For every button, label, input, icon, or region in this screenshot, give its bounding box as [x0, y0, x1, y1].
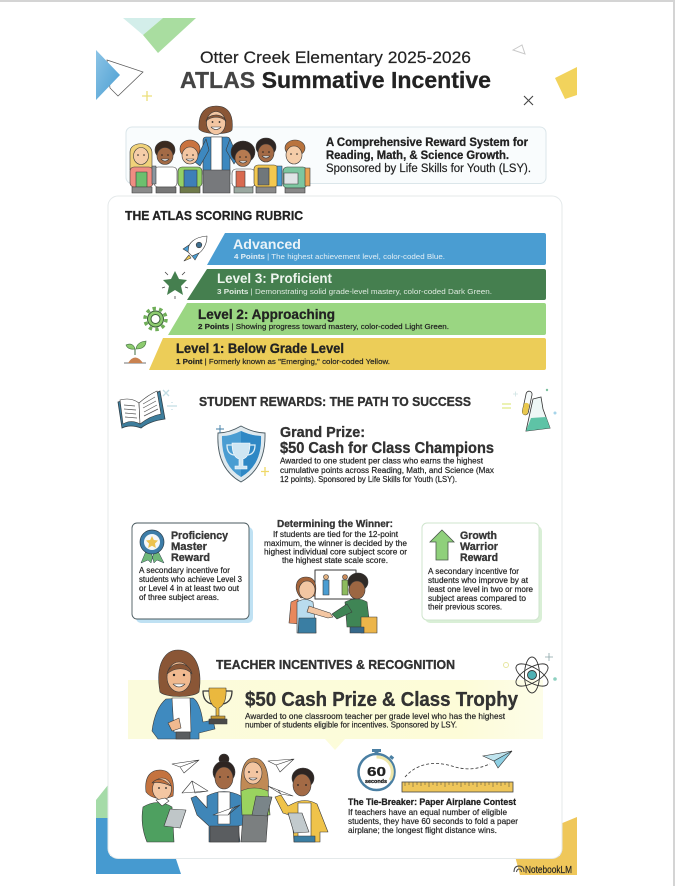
student 3	[178, 140, 202, 193]
panel: main card	[108, 196, 562, 858]
student 4	[231, 141, 255, 193]
background shape: blue bottom-left	[96, 818, 181, 874]
panel: scoring rubric	[124, 209, 546, 370]
title line: main heading: ATLAS Summative Incentive	[180, 67, 491, 93]
background shape: yellow bottom-right	[515, 817, 577, 875]
grand prize text: $50 Cash for Class Champions	[280, 440, 494, 457]
title	[180, 48, 491, 93]
advanced title: Advanced	[233, 236, 301, 252]
panel: proficiency master reward: Reward	[171, 552, 210, 564]
banner text	[326, 137, 531, 175]
tie-breaker text: If teachers have an equal number of eligible	[348, 807, 507, 817]
prize description: number of students eligible for incentives. Sponsored by LSY.	[245, 720, 457, 730]
panel: proficiency master reward: A secondary incentive for	[139, 565, 230, 575]
panel: determining the winner: Determining the Winner:	[277, 519, 393, 530]
panel: growth warrior reward: Growth	[460, 530, 497, 542]
panel: determining the winner	[264, 519, 407, 633]
panel: growth warrior reward: Reward	[460, 552, 498, 564]
level 3 description: 3 Points | Demonstrating solid grade-level mastery, color-coded Dark Green.	[217, 287, 492, 296]
decoration: book sparkles	[163, 390, 177, 410]
icon: gear	[145, 308, 166, 330]
decoration: small triangle	[513, 45, 525, 54]
panel: proficiency master reward: Proficiency	[171, 530, 229, 542]
teacher with tablet	[241, 758, 272, 842]
decoration: plus	[142, 91, 152, 101]
panel: determining the winner: maximum, the winner is decided by the	[264, 539, 407, 548]
icon: ribbon medal	[140, 530, 164, 563]
title line: school and year: Otter Creek Elementary 2025-2026	[200, 48, 471, 67]
background shape: green bottom-left	[96, 785, 108, 820]
panel: student rewards	[118, 389, 556, 484]
panel: determining the winner: the highest state scale score.	[282, 556, 388, 565]
teacher in blue blazer	[191, 754, 247, 842]
heading: scoring rubric: THE ATLAS SCORING RUBRIC	[125, 209, 303, 223]
tie-breaker text: students, they have 60 seconds to fold a paper	[348, 816, 518, 826]
flight path with airplane	[405, 751, 512, 777]
panel: growth warrior reward: students who improve by at	[428, 575, 529, 585]
panel: determining the winner: highest individual core subject score or	[264, 548, 407, 556]
icon: star	[162, 271, 188, 299]
panel: teacher incentives	[128, 650, 557, 750]
banner text: Reading, Math, & Science Growth.	[326, 150, 509, 162]
tie-breaker text: airplane; the longest flight distance wins.	[348, 825, 497, 835]
panel: determining the winner: If students are tied for the 12-point	[273, 530, 399, 539]
banner text: A Comprehensive Reward System for	[326, 137, 529, 149]
background shape: teal and green top chevron	[123, 18, 196, 53]
student 6	[283, 140, 310, 193]
teacher in yellow cardigan	[275, 768, 328, 842]
icon: trophy shield	[218, 426, 265, 482]
watermark: NotebookLM: NotebookLM	[525, 864, 572, 876]
decoration: flask symbols	[502, 389, 556, 414]
decoration: close cross	[524, 96, 533, 105]
icon: open book	[118, 391, 165, 428]
student 1	[130, 144, 153, 193]
panel: intro banner	[126, 127, 546, 184]
icon: 60 seconds stopwatch: 60	[367, 764, 386, 779]
decoration: yellow sparkle	[261, 467, 269, 476]
panel: growth warrior reward	[422, 523, 542, 623]
panel: growth warrior reward: Warrior	[460, 541, 499, 553]
student 2	[152, 141, 177, 193]
prize description: Awarded to one classroom teacher per grade level who has the highest	[245, 711, 506, 721]
illustration: teachers with paper airplanes	[142, 754, 328, 842]
panel: proficiency master reward: or Level 4 in at least two out	[139, 583, 240, 593]
decoration: atom sparkles	[504, 653, 557, 681]
bar: level 1	[149, 338, 546, 370]
illustration: teacher with students	[130, 106, 310, 193]
level 2 title: Level 2: Approaching	[198, 306, 335, 322]
grand prize text: Awarded to one student per class who earns the highest	[280, 456, 484, 466]
bar: advanced	[207, 233, 546, 265]
watermark: NotebookLM	[514, 864, 572, 876]
panel: growth warrior reward: their previous scores.	[428, 602, 502, 612]
grand prize text: cumulative points across Reading, Math, and Science (Max	[280, 466, 494, 475]
paper airplanes	[172, 759, 294, 815]
tie-breaker text	[348, 797, 518, 835]
prize headline: $50 Cash Prize & Class Trophy	[245, 689, 519, 711]
icon: rocket	[183, 236, 207, 261]
advanced description: 4 Points | The highest achievement level, color-coded Blue.	[234, 252, 445, 261]
icon: gold trophy	[203, 688, 232, 724]
teacher	[195, 106, 238, 193]
panel: growth warrior reward: A secondary incentive for	[428, 566, 519, 576]
icon: atom	[513, 657, 551, 693]
decoration: shield sparkles	[216, 425, 224, 433]
icon: 60 seconds stopwatch	[358, 749, 394, 790]
student 5	[254, 138, 282, 193]
background shape: blue arrow and outline diamond	[96, 50, 143, 100]
grand prize text: 12 points). Sponsored by Life Skills for Youth (LSY).	[280, 475, 457, 484]
teacher in green sweater	[142, 770, 186, 842]
tie-breaker text: The Tie-Breaker: Paper Airplane Contest	[348, 797, 516, 807]
icon: flask and test tube	[522, 391, 550, 431]
illustration: handshake	[289, 570, 377, 633]
level 2 description: 2 Points | Showing progress toward mastery, color-coded Light Green.	[198, 322, 449, 331]
heading: teacher incentives: TEACHER INCENTIVES & RECOGNITION	[216, 658, 455, 672]
bar: level 2	[168, 303, 546, 335]
prize description	[245, 711, 506, 730]
level 1 description: 1 Point | Formerly known as "Emerging," color-coded Yellow.	[176, 357, 390, 366]
yellow band	[128, 680, 543, 750]
icon: sprout	[124, 341, 146, 363]
panel: growth warrior reward: least one level in two or more	[428, 584, 533, 594]
grand prize text: Grand Prize:	[280, 425, 365, 441]
level 3 title: Level 3: Proficient	[217, 270, 332, 286]
panel: proficiency master reward: students who achieve Level 3	[139, 574, 242, 584]
panel: proficiency master reward: Master	[171, 541, 208, 553]
heading: student rewards: STUDENT REWARDS: THE PATH TO SUCCESS	[199, 395, 471, 409]
background shape: yellow corner	[555, 67, 577, 99]
icon: ruler	[402, 782, 513, 792]
level 1 title: Level 1: Below Grade Level	[176, 340, 344, 356]
icon: green up arrow	[430, 530, 454, 560]
panel: proficiency master reward	[132, 523, 253, 623]
icon: 60 seconds stopwatch: seconds	[365, 779, 387, 785]
banner text: Sponsored by Life Skills for Youth (LSY).	[326, 163, 531, 175]
bar: level 3	[187, 269, 546, 300]
grand prize text	[280, 425, 494, 484]
illustration: teacher with trophy	[152, 650, 215, 739]
panel: proficiency master reward: of three subject areas.	[139, 592, 219, 602]
panel: growth warrior reward: subject areas compared to	[428, 593, 526, 603]
